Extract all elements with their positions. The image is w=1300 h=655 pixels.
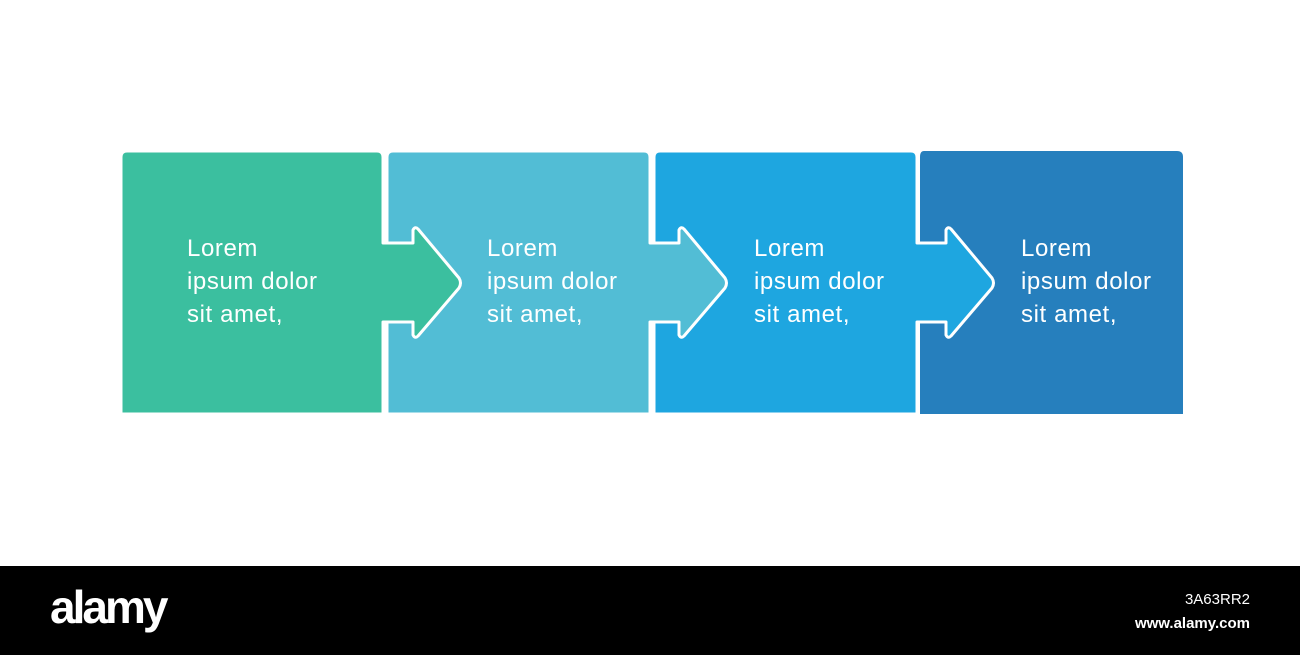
text 4 <box>1021 235 1152 328</box>
text 3: ipsum dolor <box>754 268 885 295</box>
text 2 <box>487 235 618 328</box>
text 2: sit amet, <box>487 301 583 328</box>
image id: www.alamy.com <box>1135 615 1250 632</box>
footer bar <box>0 566 1300 655</box>
text 3: sit amet, <box>754 301 850 328</box>
text 4: ipsum dolor <box>1021 268 1152 295</box>
panel 3 <box>654 151 994 414</box>
text 1: sit amet, <box>187 301 283 328</box>
panel 4 <box>920 151 1183 414</box>
text 2: ipsum dolor <box>487 268 618 295</box>
text 4: Lorem <box>1021 235 1092 262</box>
text 1: ipsum dolor <box>187 268 318 295</box>
image id: 3A63RR2 <box>1185 591 1250 608</box>
logo: alamy <box>50 581 165 633</box>
text 3 <box>754 235 885 328</box>
text 4: sit amet, <box>1021 301 1117 328</box>
text 1: Lorem <box>187 235 258 262</box>
text 3: Lorem <box>754 235 825 262</box>
text 2: Lorem <box>487 235 558 262</box>
panel 2 <box>387 151 726 414</box>
image id <box>1135 591 1250 632</box>
panel 1 <box>121 151 460 414</box>
text 1 <box>187 235 318 328</box>
